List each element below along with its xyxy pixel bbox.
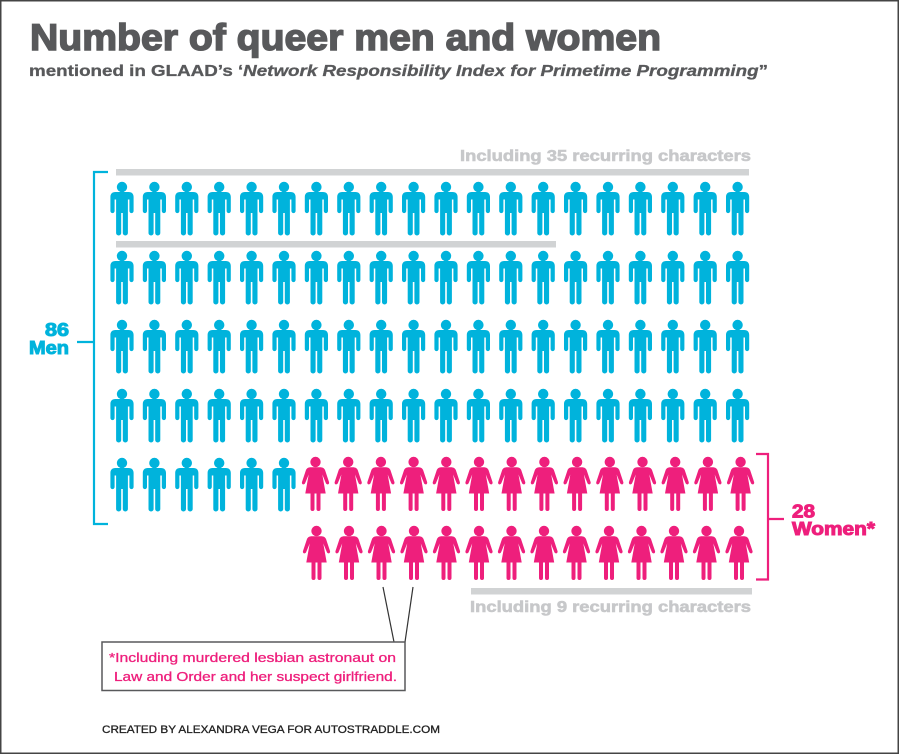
credit: CREATED BY ALEXANDRA VEGA FOR AUTOSTRADDLE.COM (102, 724, 440, 736)
callout box: Law and Order and her suspect girlfriend. (114, 669, 397, 684)
subtitle: mentioned in GLAAD’s ‘ Network Responsibility Index for Primetime Programming ” (29, 63, 768, 80)
label: 86 men (29, 320, 69, 358)
label: 28 women (792, 502, 875, 539)
label: including 35 recurring characters: Including 35 recurring characters (460, 148, 751, 165)
label: 28 women: Women* (792, 519, 875, 539)
title: Number of queer men and women (30, 17, 661, 58)
label: 86 men: 86 (45, 320, 69, 340)
bar: recurring men, second row (116, 241, 556, 248)
label: 86 men: Men (29, 338, 69, 358)
bar: recurring women (471, 588, 752, 594)
bracket: men (77, 172, 108, 524)
bracket: women (756, 454, 784, 580)
callout box: *Including murdered lesbian astronaut on (109, 650, 396, 665)
callout leader lines (383, 587, 413, 642)
label: 28 women: 28 (792, 502, 815, 522)
pictogram: 86 men (110, 182, 749, 512)
pictogram: 28 women (302, 457, 754, 580)
label: including 9 recurring characters: Including 9 recurring characters (470, 599, 751, 616)
bar: recurring men, first row (116, 169, 749, 176)
callout box (102, 642, 405, 690)
